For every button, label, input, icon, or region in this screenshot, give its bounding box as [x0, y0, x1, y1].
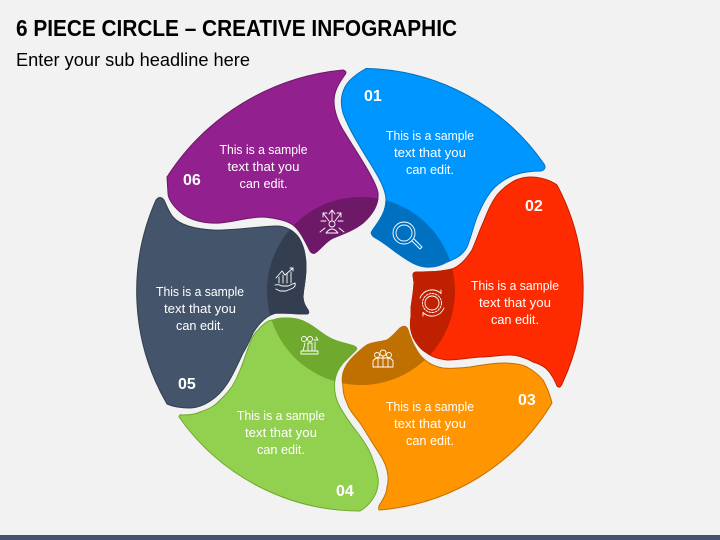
title: 6 PIECE CIRCLE – CREATIVE INFOGRAPHIC [16, 15, 457, 41]
icon: hand with chart [275, 268, 295, 291]
orange piece shape [342, 326, 552, 510]
text block 06: This is a sample [220, 143, 308, 157]
red piece shape [410, 177, 583, 387]
text block 01: This is a sample [386, 129, 474, 143]
text block 01: text that you [394, 146, 466, 160]
text block 02: This is a sample [471, 279, 559, 293]
subtitle: Enter your sub headline here [16, 50, 250, 70]
number 01: 01 [364, 88, 382, 105]
number 04: 04 [336, 483, 354, 500]
text block 04: can edit. [257, 443, 305, 457]
purple piece shape [167, 70, 378, 253]
text block 03: This is a sample [386, 400, 474, 414]
panel: 05 slate [137, 198, 309, 408]
panel: 02 red [410, 177, 583, 387]
panel: 01 blue [341, 68, 545, 267]
icon: gear cycle [420, 290, 444, 316]
icon: chess pieces [301, 336, 318, 354]
number 06: 06 [183, 172, 201, 189]
text block 02: can edit. [491, 313, 539, 327]
icon: magnifier [393, 222, 422, 249]
number 02: 02 [525, 198, 543, 215]
green piece shape [179, 318, 378, 511]
text block 05: can edit. [176, 319, 224, 333]
icon: person with arrows [320, 210, 344, 233]
text block 01: can edit. [406, 163, 454, 177]
footer bar [0, 535, 720, 540]
icon: team [373, 350, 393, 367]
slate piece shape [137, 198, 309, 408]
text block 03: can edit. [406, 434, 454, 448]
panel: 04 green [179, 318, 378, 511]
text block 06: text that you [228, 160, 300, 174]
panel: 06 purple [167, 70, 378, 253]
text block 05: This is a sample [156, 285, 244, 299]
text block 02: text that you [479, 296, 551, 310]
text block 03: text that you [394, 417, 466, 431]
number 03: 03 [518, 392, 536, 409]
text block 05: text that you [164, 302, 236, 316]
text block 06: can edit. [240, 177, 288, 191]
number 05: 05 [178, 376, 196, 393]
text block 04: text that you [245, 426, 317, 440]
panel: 03 orange [342, 326, 552, 510]
text block 04: This is a sample [237, 409, 325, 423]
blue piece shape [341, 68, 545, 267]
